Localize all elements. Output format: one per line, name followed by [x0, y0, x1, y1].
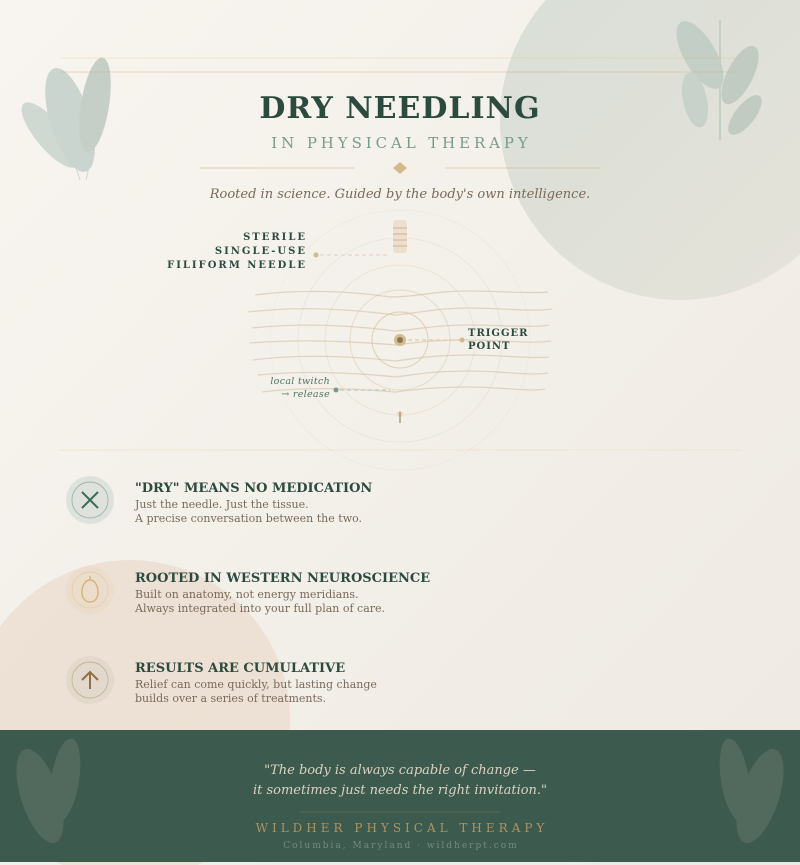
label: local twitch release: local twitch	[270, 376, 330, 387]
point 1: dry means no medication	[66, 476, 372, 525]
icon: footer leaves	[16, 738, 784, 843]
body text: A precise conversation between the two.	[135, 512, 362, 525]
location: Columbia, Maryland · wildherpt.com	[283, 841, 519, 851]
icon: cross in circle	[66, 476, 114, 524]
quote: it sometimes just needs the right invitation."	[253, 783, 547, 798]
footer band	[0, 730, 800, 862]
icon: leaves top right	[667, 14, 768, 140]
label: sterile single-use filiform needle: STERILE	[243, 232, 307, 243]
point 2: rooted in western neuroscience	[66, 566, 430, 615]
tagline: Rooted in science. Guided by the body's own intelligence.	[210, 187, 590, 202]
label: sterile single-use filiform needle	[167, 232, 307, 271]
trigger point dot	[394, 334, 406, 346]
body text	[134, 588, 385, 615]
label: local twitch release: → release	[281, 389, 330, 400]
quote: "The body is always capable of change —	[264, 763, 536, 778]
body text: Relief can come quickly, but lasting change	[135, 678, 377, 691]
body text	[135, 678, 377, 705]
label: trigger point: POINT	[468, 341, 510, 352]
label: local twitch release	[270, 376, 330, 400]
subtitle: IN PHYSICAL THERAPY	[271, 134, 532, 152]
concentric ripple rings	[270, 210, 530, 470]
diagram: dry needling cross-section	[167, 210, 552, 442]
body text: Just the needle. Just the tissue.	[135, 498, 309, 511]
quote	[253, 763, 547, 798]
leader: twitch label	[334, 388, 390, 392]
body text: Built on anatomy, not energy meridians.	[135, 588, 359, 601]
needle tip	[397, 411, 403, 423]
heading: ROOTED IN WESTERN NEUROSCIENCE	[135, 571, 430, 586]
title: DRY NEEDLING	[259, 91, 541, 126]
background circle: top right	[500, 0, 800, 300]
icon: leaves top left	[13, 55, 116, 180]
icon: up arrow in circle	[66, 656, 114, 704]
label: sterile single-use filiform needle: SINGLE-USE	[215, 246, 307, 257]
leader: trigger point label	[408, 338, 464, 342]
body text: builds over a series of treatments.	[135, 692, 326, 705]
body text	[134, 498, 362, 525]
clinic name: WILDHER PHYSICAL THERAPY	[256, 821, 548, 835]
header divider with diamond	[200, 162, 600, 174]
leader: needle label	[314, 252, 389, 258]
heading: RESULTS ARE CUMULATIVE	[135, 661, 345, 676]
label: trigger point: TRIGGER	[468, 328, 528, 339]
background circle: bottom left	[0, 560, 290, 865]
heading: "DRY" MEANS NO MEDICATION	[135, 481, 372, 496]
label: sterile single-use filiform needle: FILIFORM NEEDLE	[167, 260, 307, 271]
label: trigger point	[468, 328, 528, 352]
body text: Always integrated into your full plan of care.	[135, 602, 385, 615]
muscle fibres	[248, 291, 552, 392]
needle handle	[393, 220, 407, 253]
point 3: results are cumulative	[66, 656, 377, 705]
icon: seed in circle	[66, 566, 114, 614]
